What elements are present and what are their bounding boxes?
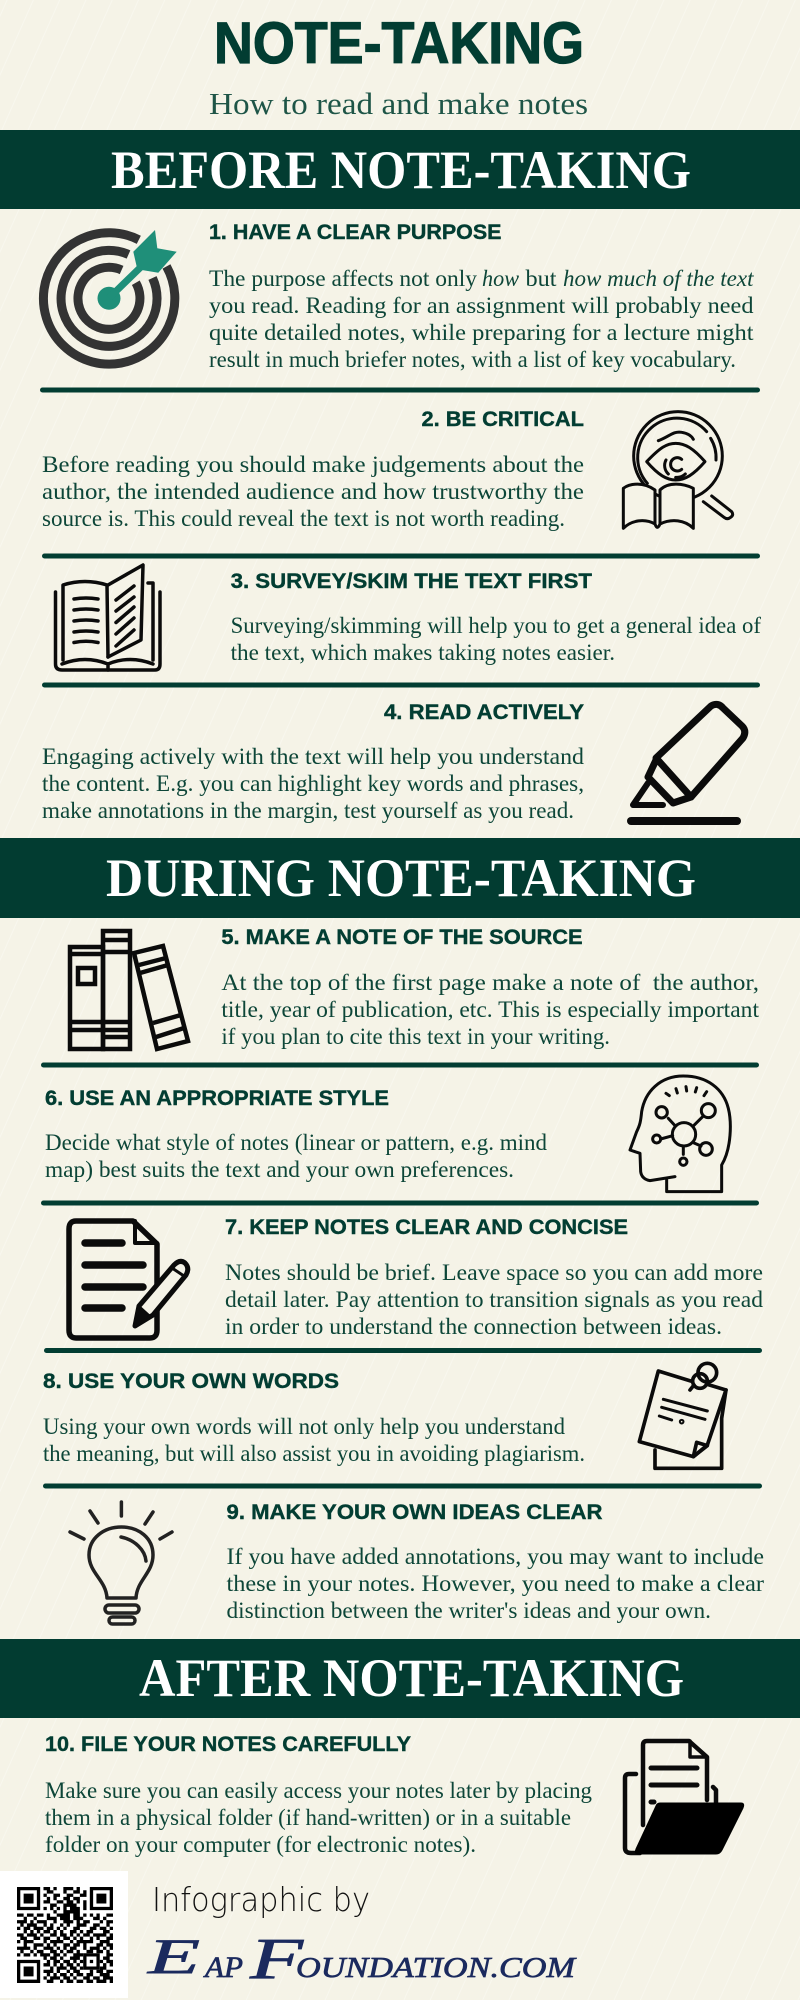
body text bbox=[226, 1544, 764, 1623]
body text: Before reading you should make judgements about the bbox=[42, 452, 584, 477]
body text: The purpose affects not only bbox=[209, 266, 478, 291]
body text bbox=[45, 1778, 592, 1857]
panel: item 9 make your own ideas clear bbox=[70, 1501, 764, 1624]
section banner: before note-taking: BEFORE NOTE-TAKING bbox=[111, 140, 691, 200]
title: NOTE-TAKING bbox=[214, 11, 584, 76]
body text: them in a physical folder (if hand-written) or in a suitable bbox=[45, 1805, 571, 1830]
subtitle: How to read and make notes bbox=[209, 86, 588, 121]
heading: 2. BE CRITICAL bbox=[422, 408, 584, 431]
body text: but bbox=[526, 266, 557, 291]
body text: these in your notes. However, you need to make a clear bbox=[226, 1571, 764, 1596]
section banner: after note-taking: AFTER NOTE-TAKING bbox=[139, 1648, 684, 1708]
body text: Using your own words will not only help you understand bbox=[43, 1414, 565, 1439]
body text bbox=[42, 452, 584, 531]
logo: EapFoundation.com: OUNDATION.COM bbox=[296, 1952, 577, 1984]
panel: item 8 use your own words bbox=[43, 1363, 726, 1468]
panel: item 1 have a clear purpose bbox=[43, 221, 754, 372]
body text bbox=[225, 1260, 764, 1339]
logo: EapFoundation.com bbox=[146, 1926, 577, 1991]
body text: you read. Reading for an assignment will probably need bbox=[209, 293, 754, 318]
heading: 7. KEEP NOTES CLEAR AND CONCISE bbox=[225, 1216, 628, 1239]
body text: author, the intended audience and how trustworthy the bbox=[42, 479, 584, 504]
heading: 3. SURVEY/SKIM THE TEXT FIRST bbox=[231, 570, 592, 593]
body text: if you plan to cite this text in your writing. bbox=[221, 1024, 610, 1049]
heading: 10. FILE YOUR NOTES CAREFULLY bbox=[45, 1733, 411, 1756]
body text bbox=[221, 970, 760, 1049]
body text: the content. E.g. you can highlight key words and phrases, bbox=[42, 771, 584, 796]
heading: 6. USE AN APPROPRIATE STYLE bbox=[45, 1087, 389, 1110]
logo: EapFoundation.com: AP bbox=[203, 1951, 243, 1984]
body text: in order to understand the connection between ideas. bbox=[225, 1314, 722, 1339]
panel: item 2 be critical bbox=[42, 408, 733, 531]
body text: Decide what style of notes (linear or pattern, e.g. mind bbox=[45, 1130, 547, 1155]
body text: the text, which makes taking notes easier. bbox=[231, 640, 615, 665]
body text: how bbox=[482, 266, 520, 291]
icon: magnifier, eye and book bbox=[623, 412, 733, 528]
credit: infographic by: Infographic by bbox=[152, 1880, 370, 1919]
panel: item 10 file your notes carefully bbox=[45, 1733, 744, 1857]
body text: If you have added annotations, you may want to include bbox=[226, 1544, 764, 1569]
panel: item 3 survey/skim bbox=[56, 565, 761, 670]
body text: title, year of publication, etc. This is especially important bbox=[221, 997, 760, 1022]
heading: 5. MAKE A NOTE OF THE SOURCE bbox=[221, 926, 583, 949]
body text: make annotations in the margin, test yourself as you read. bbox=[42, 798, 574, 823]
body text: result in much briefer notes, with a list of key vocabulary. bbox=[209, 347, 736, 372]
icon: light bulb bbox=[70, 1502, 172, 1624]
icon: document and pencil bbox=[69, 1221, 188, 1338]
body text bbox=[209, 266, 754, 372]
body text bbox=[43, 1414, 585, 1466]
body text: source is. This could reveal the text is not worth reading. bbox=[42, 506, 565, 531]
body text bbox=[42, 744, 585, 823]
heading: 9. MAKE YOUR OWN IDEAS CLEAR bbox=[226, 1501, 602, 1524]
icon: highlighter bbox=[631, 704, 745, 821]
body text: folder on your computer (for electronic notes). bbox=[45, 1832, 476, 1857]
section banner: before note-taking bbox=[0, 130, 800, 209]
panel: item 7 keep notes clear and concise bbox=[69, 1216, 764, 1339]
QR code bbox=[0, 1871, 128, 1998]
icon: pinned note bbox=[639, 1363, 726, 1468]
icon: open book bbox=[56, 565, 160, 670]
panel: item 5 make a note of the source bbox=[70, 926, 760, 1049]
panel: item 6 use an appropriate style bbox=[45, 1076, 730, 1192]
heading: 1. HAVE A CLEAR PURPOSE bbox=[209, 221, 502, 244]
body text: the meaning, but will also assist you in avoiding plagiarism. bbox=[43, 1441, 585, 1466]
body text: At the top of the first page make a note of the author, bbox=[221, 970, 759, 995]
heading: 8. USE YOUR OWN WORDS bbox=[43, 1370, 339, 1393]
icon: folder with document bbox=[625, 1741, 744, 1854]
section banner: during note-taking: DURING NOTE-TAKING bbox=[106, 848, 696, 908]
section banner: during note-taking bbox=[0, 838, 800, 918]
body text: how much of the text bbox=[563, 266, 754, 291]
body text: Engaging actively with the text will help you understand bbox=[42, 744, 585, 769]
heading: 4. READ ACTIVELY bbox=[384, 701, 584, 724]
body text: map) best suits the text and your own preferences. bbox=[45, 1157, 514, 1182]
logo: EapFoundation.com: F bbox=[249, 1926, 304, 1991]
body text: Make sure you can easily access your notes later by placing bbox=[45, 1778, 592, 1803]
panel: item 4 read actively bbox=[42, 701, 745, 823]
section banner: after note-taking bbox=[0, 1639, 800, 1718]
body text: detail later. Pay attention to transition signals as you read bbox=[225, 1287, 764, 1312]
body text: Notes should be brief. Leave space so you can add more bbox=[225, 1260, 763, 1285]
body text: distinction between the writer's ideas and your own. bbox=[226, 1598, 711, 1623]
icon: target with dart bbox=[43, 230, 177, 364]
logo: EapFoundation.com: E bbox=[146, 1928, 200, 1984]
icon: books bbox=[70, 931, 188, 1049]
body text bbox=[45, 1130, 547, 1182]
body text: Surveying/skimming will help you to get a general idea of bbox=[231, 613, 761, 638]
body text bbox=[231, 613, 761, 665]
icon: head with mind map bbox=[630, 1076, 730, 1192]
body text: quite detailed notes, while preparing for a lecture might bbox=[209, 320, 754, 345]
